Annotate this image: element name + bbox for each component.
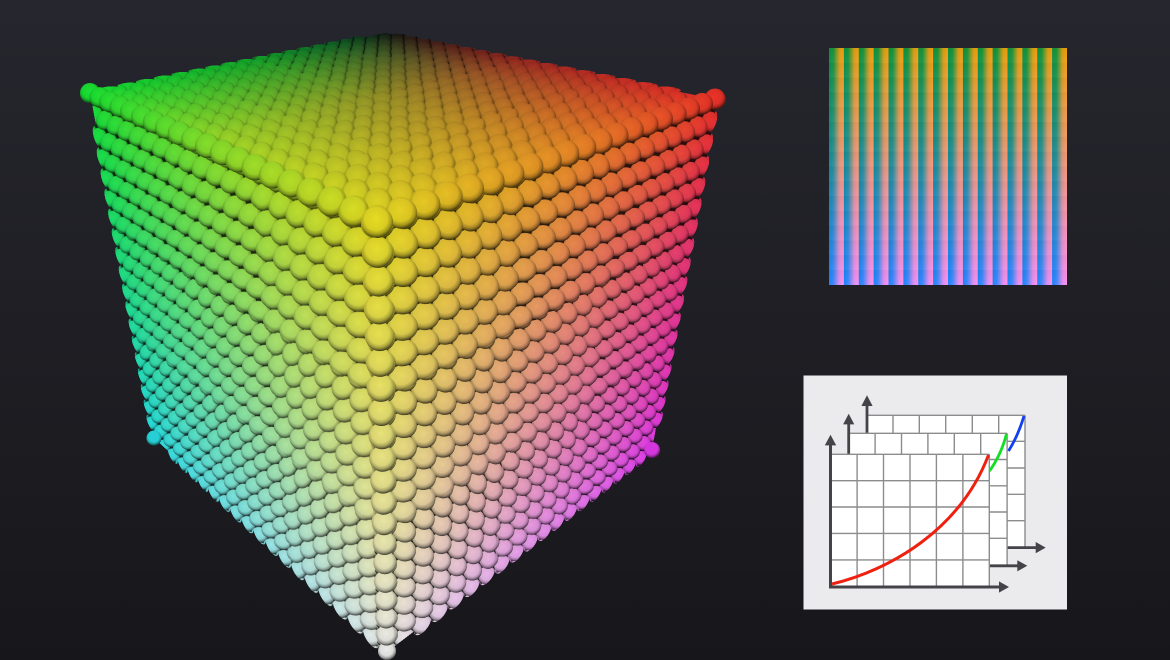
cube left face: green to yellow, cyan to white bbox=[92, 86, 379, 648]
bottom-right corner sphere bbox=[644, 442, 660, 458]
bottom-left corner sphere bbox=[146, 430, 162, 446]
top-right edge spheres bbox=[361, 88, 726, 238]
flattened 2D LUT colour swatch bbox=[829, 48, 1067, 285]
cube top face: green, dark, red, yellow corners bbox=[102, 33, 696, 210]
top-left edge spheres bbox=[80, 83, 369, 227]
back chart: blue channel bbox=[861, 395, 1046, 553]
front chart: red channel bbox=[825, 435, 1009, 593]
cube right face: yellow to red, white to magenta bbox=[366, 109, 718, 646]
vertical front edge spheres bbox=[362, 237, 397, 660]
cube front edges: individually placed spheres bbox=[80, 83, 726, 660]
panel: RGB curves chart bbox=[804, 376, 1067, 610]
cube of coloured spheres bbox=[80, 33, 726, 660]
middle chart: green channel bbox=[843, 414, 1027, 571]
